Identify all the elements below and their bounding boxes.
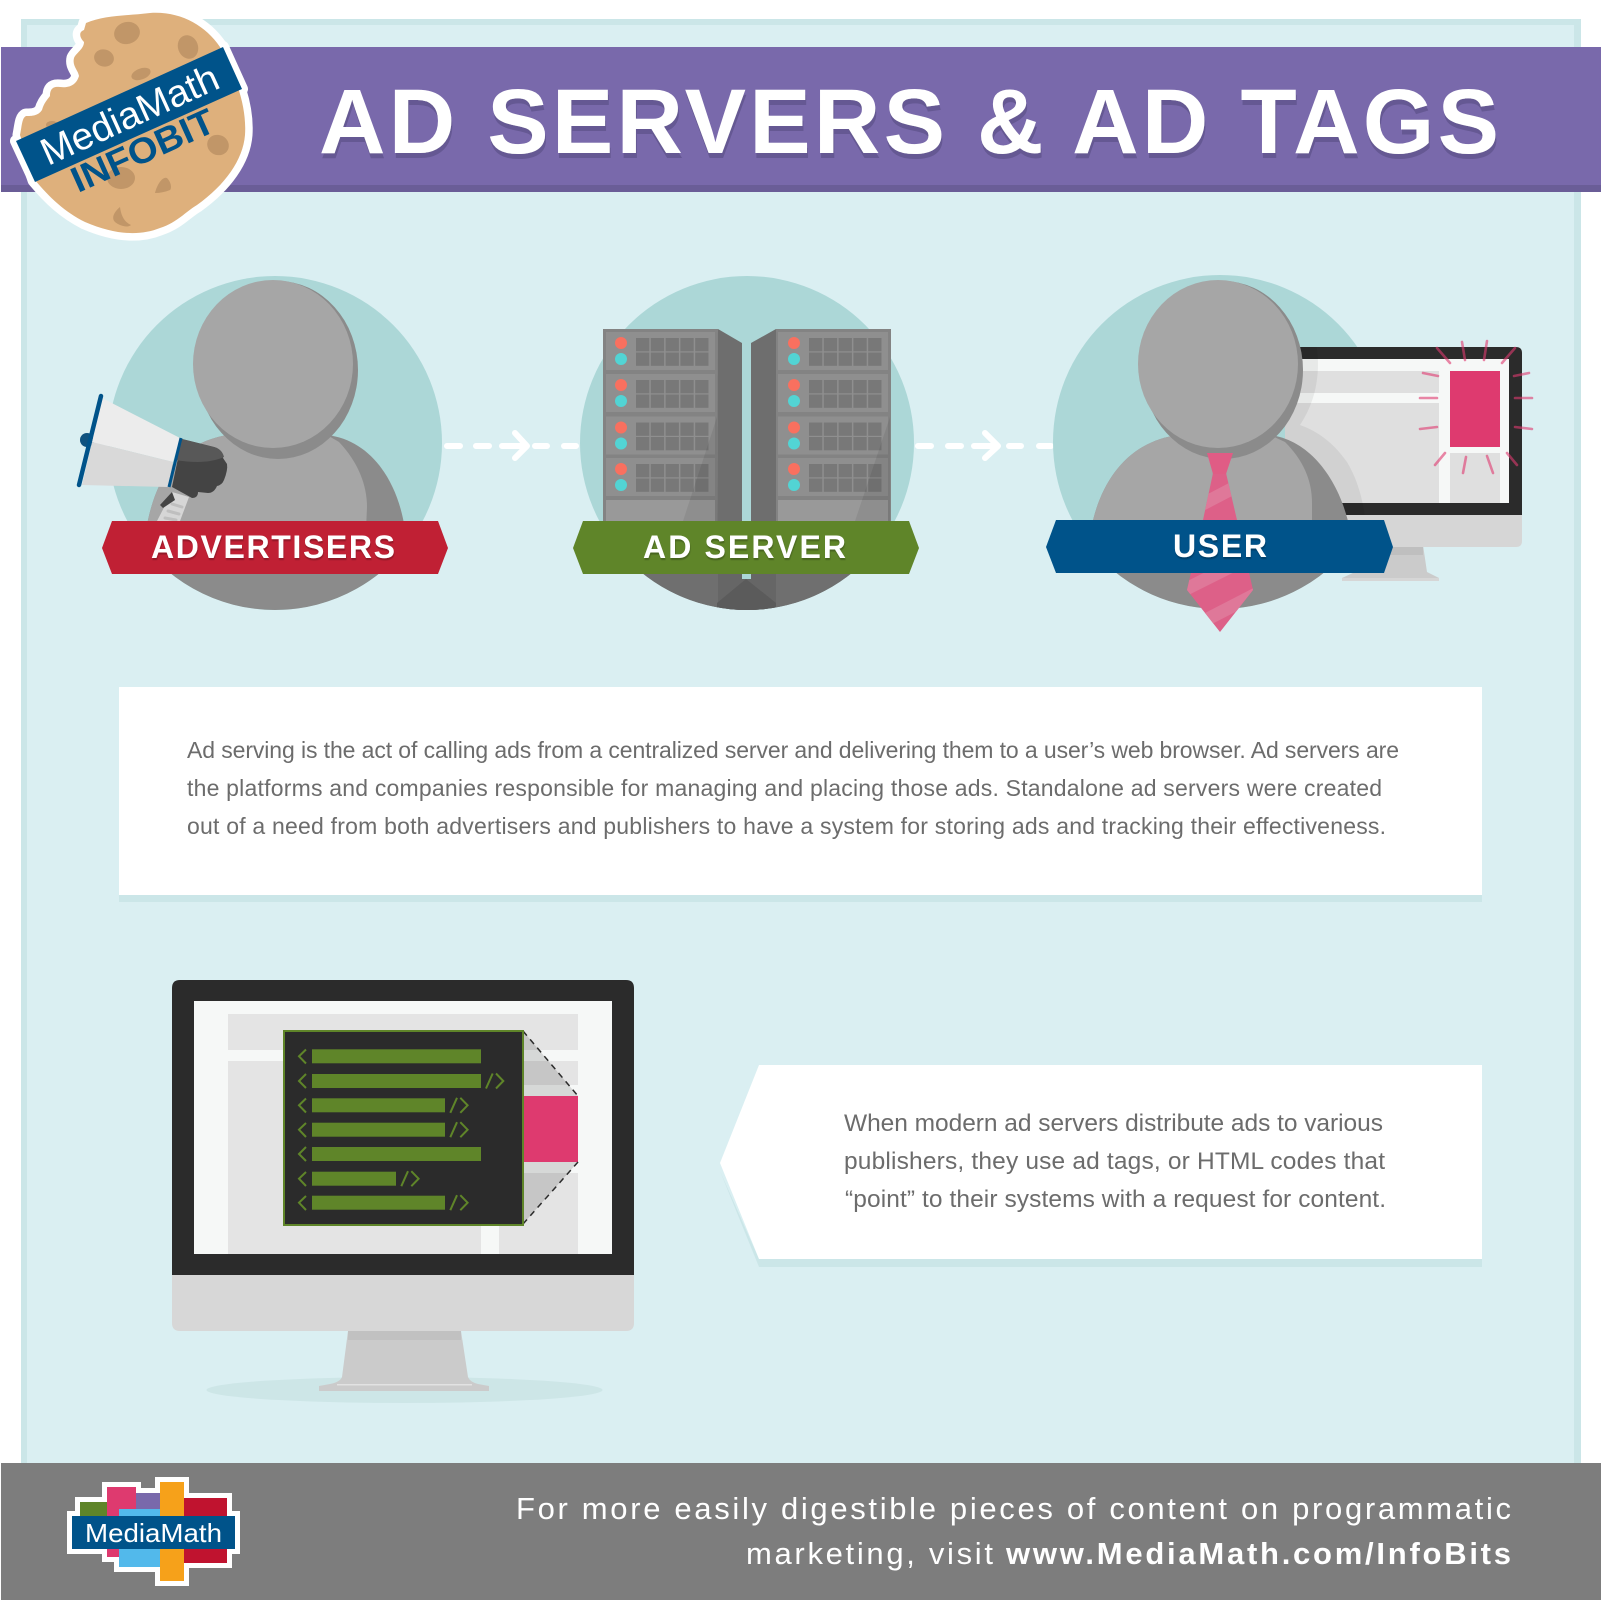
ad server figure (573, 276, 919, 619)
pink ad (1450, 371, 1500, 447)
description text: out of a need from both advertisers and publishers to have a system for storing ads and tracking their effectiveness. (187, 813, 1386, 839)
description text: Ad serving is the act of calling ads from a centralized server and delivering them to a user’s web browser. Ad servers are (187, 737, 1399, 763)
monitor with ad tag code (172, 980, 634, 1403)
person body (148, 436, 404, 610)
server base (644, 574, 850, 610)
monitor stand (1342, 545, 1439, 581)
person shadow on monitor (1285, 359, 1362, 503)
badge ribbon (16, 47, 242, 182)
monitor shadow (206, 1377, 602, 1403)
person head (1138, 280, 1303, 459)
badge word: INFOBIT: INFOBIT (64, 100, 221, 200)
cookie badge: MediaMath InfoBit (16, 13, 245, 233)
monitor stand (319, 1331, 489, 1391)
label: ad server: AD SERVER (643, 529, 846, 565)
dashed lines (523, 1031, 578, 1224)
label: advertisers: ADVERTISERS (151, 529, 395, 565)
text panel: ad tags callout (720, 1065, 1482, 1267)
ad rays (1420, 341, 1532, 473)
callout text (844, 1110, 1386, 1213)
icon: tie (1187, 453, 1253, 632)
description text (187, 737, 1399, 839)
footer text: For more easily digestible pieces of content on programmatic (516, 1491, 1511, 1526)
logo outline (72, 1482, 235, 1581)
title: AD SERVERS & AD TAGS (319, 71, 1499, 173)
MediaMath logo (72, 1482, 235, 1581)
icon: cookie (20, 13, 245, 233)
person bottom (1117, 573, 1323, 609)
label: advertisers (102, 521, 448, 574)
description text: the platforms and companies responsible for managing and placing those ads. Standalone ad servers were created (187, 775, 1382, 801)
label: user (1046, 520, 1393, 573)
person body (1093, 436, 1348, 608)
teal circle (1053, 275, 1387, 609)
person head (193, 280, 358, 459)
text panel: ad serving description (119, 687, 1482, 902)
arrow: advertisers to ad server (447, 433, 576, 458)
arrow: ad server to user (918, 433, 1051, 458)
expansion shadow (523, 1031, 578, 1224)
teal circle (108, 276, 442, 610)
callout text: publishers, they use ad tags, or HTML codes that (844, 1148, 1385, 1175)
cookie chips (46, 19, 232, 226)
monitor body (1285, 515, 1522, 547)
code panel (284, 1031, 523, 1225)
monitor screen (194, 1001, 612, 1254)
monitor body (172, 1275, 634, 1331)
badge word: MediaMath: MediaMath (34, 57, 226, 174)
label: user: USER (1173, 528, 1267, 564)
pink ad (523, 1096, 578, 1162)
cookie white outline (16, 13, 245, 233)
footer bar (1, 1463, 1601, 1600)
logo wordmark: MediaMath (85, 1518, 222, 1548)
footer text: marketing, visit (746, 1536, 993, 1571)
logo blocks (72, 1482, 235, 1581)
callout text: When modern ad servers distribute ads to various (844, 1110, 1383, 1137)
server racks (603, 329, 891, 619)
advertisers figure (79, 276, 448, 640)
monitor with flashing ad (1285, 340, 1534, 581)
icon: megaphone (79, 396, 227, 521)
teal circle (580, 276, 914, 610)
title banner (1, 47, 1601, 192)
monitor bezel (1285, 347, 1522, 515)
person bottom (172, 574, 378, 610)
code brackets (299, 1050, 503, 1210)
footer text: www.MediaMath.com/InfoBits (1005, 1536, 1511, 1571)
label: ad server (573, 521, 919, 574)
footer text (516, 1491, 1511, 1571)
monitor screen (1285, 359, 1509, 503)
monitor bezel (172, 980, 634, 1275)
code bars (312, 1049, 481, 1210)
callout text: “point” to their systems with a request for content. (845, 1186, 1386, 1213)
user figure (1046, 275, 1532, 640)
